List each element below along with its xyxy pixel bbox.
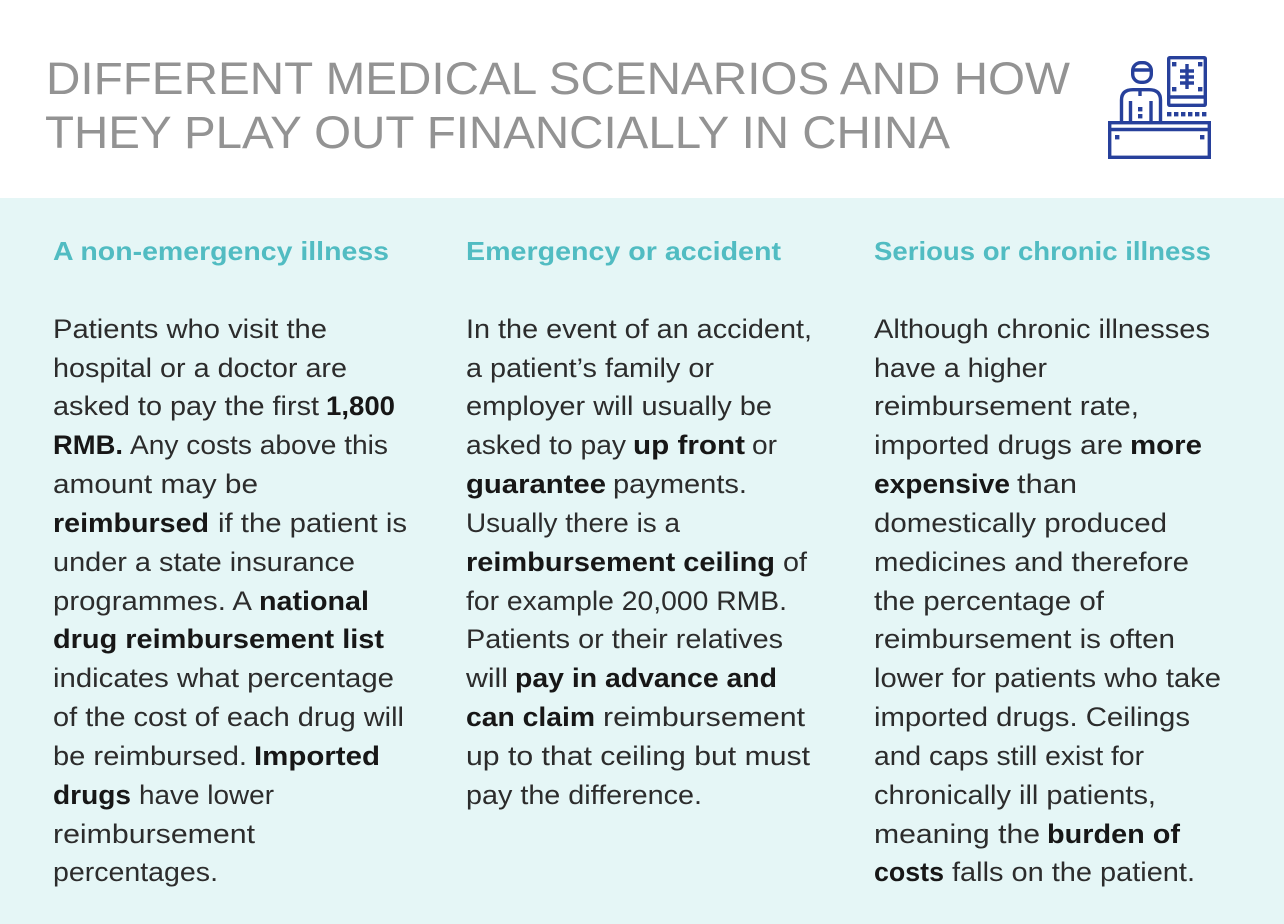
text block: non-emergency body: be reimbursed.: [53, 741, 247, 771]
text block: chronic illness body: costs: [874, 857, 944, 887]
text block: emergency body: In the event of an accident,: [466, 314, 812, 344]
text block: chronic illness body: expensive: [874, 469, 1010, 499]
text block: non-emergency body: indicates what percentage: [53, 663, 394, 693]
title: [45, 53, 1071, 158]
text block: emergency body: pay in advance and: [515, 663, 777, 693]
text block: non-emergency body: drug reimbursement list: [53, 624, 384, 654]
column: emergency or accident: [465, 236, 812, 810]
heading: serious or chronic illness: Serious or chronic illness: [874, 236, 1211, 266]
text block: chronic illness body: more: [1130, 430, 1202, 460]
panel: pale teal background: [0, 198, 1284, 924]
text block: chronic illness body: falls on the patient.: [952, 857, 1195, 887]
text block: non-emergency body: national: [259, 586, 369, 616]
text block: chronic illness body: Although chronic illnesses: [874, 314, 1210, 344]
text block: non-emergency body: programmes. A: [53, 586, 252, 616]
text block: emergency body: will: [465, 663, 508, 693]
column: serious or chronic illness: [874, 236, 1221, 887]
heading: non-emergency illness: A non-emergency illness: [53, 236, 389, 266]
text block: emergency body: can claim: [466, 702, 595, 732]
text block: non-emergency body: amount may be: [53, 469, 258, 499]
text block: non-emergency body: Imported: [254, 741, 380, 771]
text block: non-emergency body: 1,800: [326, 391, 395, 421]
text block: emergency body: payments.: [613, 469, 747, 499]
text block: emergency body: [465, 314, 812, 810]
text block: chronic illness body: lower for patients who take: [874, 663, 1221, 693]
text block: non-emergency body: Any costs above this: [130, 430, 388, 460]
text block: emergency body: reimbursement ceiling: [466, 547, 775, 577]
text block: emergency body: pay the difference.: [466, 780, 702, 810]
text block: emergency body: or: [752, 430, 777, 460]
text block: chronic illness body: meaning the: [874, 819, 1040, 849]
text block: non-emergency body: reimbursement: [53, 819, 256, 849]
text block: emergency body: up to that ceiling but must: [466, 741, 811, 771]
text block: chronic illness body: imported drugs are: [874, 430, 1123, 460]
text block: chronic illness body: and caps still exist for: [874, 741, 1144, 771]
heading: emergency or accident: Emergency or accident: [466, 236, 781, 266]
icon: doctor at desk with x-ray: [1110, 58, 1209, 157]
text block: chronic illness body: chronically ill patients,: [874, 780, 1156, 810]
text block: chronic illness body: than: [1017, 469, 1077, 499]
text block: emergency body: reimbursement: [603, 702, 806, 732]
text block: chronic illness body: reimbursement is often: [874, 624, 1175, 654]
text block: non-emergency body: of the cost of each drug will: [53, 702, 404, 732]
text block: emergency body: Patients or their relatives: [466, 624, 783, 654]
text block: non-emergency body: drugs: [53, 780, 131, 810]
text block: chronic illness body: burden of: [1047, 819, 1181, 849]
text block: non-emergency body: if the patient is: [218, 508, 407, 538]
text block: chronic illness body: medicines and therefore: [874, 547, 1189, 577]
text block: emergency body: employer will usually be: [466, 391, 772, 421]
text block: chronic illness body: have a higher: [874, 353, 1047, 383]
text block: chronic illness body: the percentage of: [874, 586, 1105, 616]
text block: non-emergency body: Patients who visit the: [53, 314, 327, 344]
text block: emergency body: asked to pay: [466, 430, 627, 460]
text block: chronic illness body: imported drugs. Ceilings: [874, 702, 1190, 732]
text block: non-emergency body: under a state insurance: [53, 547, 355, 577]
column: non-emergency illness: [53, 236, 407, 887]
text block: chronic illness body: [874, 314, 1221, 887]
text block: non-emergency body: have lower: [139, 780, 274, 810]
text block: non-emergency body: asked to pay the first: [53, 391, 320, 421]
text block: non-emergency body: percentages.: [53, 857, 218, 887]
text block: chronic illness body: reimbursement rate,: [874, 391, 1139, 421]
text block: emergency body: up front: [633, 430, 745, 460]
text block: emergency body: Usually there is a: [466, 508, 681, 538]
text block: non-emergency body: reimbursed: [53, 508, 209, 538]
text block: non-emergency body: RMB.: [53, 430, 123, 460]
text block: emergency body: a patient’s family or: [466, 353, 714, 383]
text block: emergency body: guarantee: [466, 469, 606, 499]
text block: non-emergency body: [53, 314, 407, 887]
text block: non-emergency body: hospital or a doctor are: [53, 353, 347, 383]
title: DIFFERENT MEDICAL SCENARIOS AND HOW: [46, 53, 1071, 104]
title: THEY PLAY OUT FINANCIALLY IN CHINA: [45, 107, 950, 158]
text block: emergency body: for example 20,000 RMB.: [466, 586, 787, 616]
text block: emergency body: of: [783, 547, 808, 577]
text block: chronic illness body: domestically produced: [874, 508, 1167, 538]
